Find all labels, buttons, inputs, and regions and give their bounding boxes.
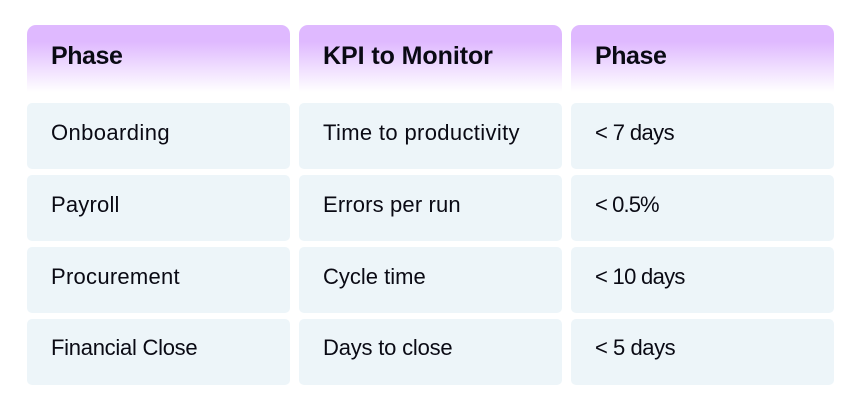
row 3 phase bbox=[27, 247, 290, 313]
row 4 KPI: Days to close bbox=[323, 335, 452, 360]
row 3 phase: Procurement bbox=[51, 264, 180, 289]
row 1 phase bbox=[27, 103, 290, 169]
row 3 target: < 10 days bbox=[595, 264, 685, 289]
row 1 KPI bbox=[299, 103, 562, 169]
row 2 target: < 0.5% bbox=[595, 192, 659, 217]
row 1 target bbox=[571, 103, 834, 169]
row 1 KPI: Time to productivity bbox=[323, 120, 520, 145]
row 1 phase: Onboarding bbox=[51, 120, 170, 145]
row 4 target: < 5 days bbox=[595, 335, 675, 360]
header: Phase (target): Phase bbox=[595, 42, 666, 70]
row 2 phase: Payroll bbox=[51, 192, 120, 217]
row 2 target bbox=[571, 175, 834, 241]
header: KPI to Monitor bbox=[299, 25, 562, 92]
header: Phase (target) bbox=[571, 25, 834, 92]
row 4 phase bbox=[27, 319, 290, 385]
row 4 KPI bbox=[299, 319, 562, 385]
row 3 KPI: Cycle time bbox=[323, 264, 426, 289]
row 2 KPI bbox=[299, 175, 562, 241]
header: KPI to Monitor: KPI to Monitor bbox=[323, 42, 493, 70]
row 2 KPI: Errors per run bbox=[323, 192, 461, 217]
header: Phase bbox=[27, 25, 290, 92]
row 4 phase: Financial Close bbox=[51, 335, 197, 360]
row 3 target bbox=[571, 247, 834, 313]
row 3 KPI bbox=[299, 247, 562, 313]
row 2 phase bbox=[27, 175, 290, 241]
row 4 target bbox=[571, 319, 834, 385]
header: Phase: Phase bbox=[51, 42, 122, 70]
row 1 target: < 7 days bbox=[595, 120, 674, 145]
